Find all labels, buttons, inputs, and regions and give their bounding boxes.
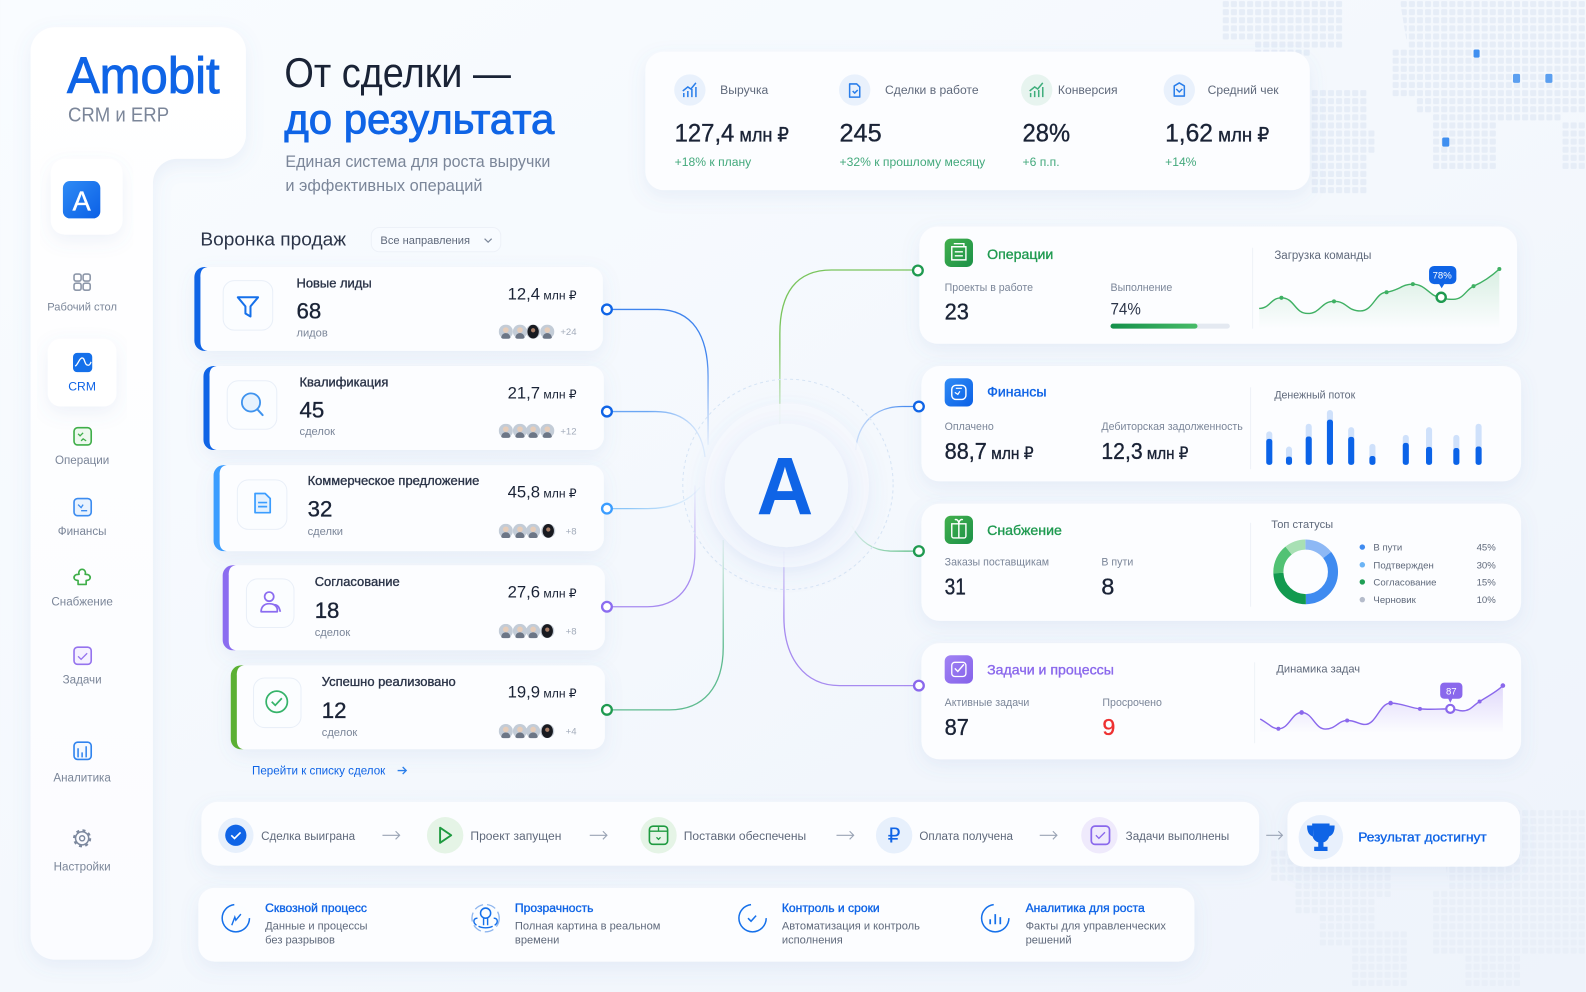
KPI: Средний чек: 1,62 млн ₽ [1165,120,1269,148]
benefit: Контроль и сроки: исполнения [782,934,843,946]
arrow to result [1266,831,1282,839]
world dot map top right [1222,0,1586,194]
module card: Финансы: Оплачено [945,421,994,433]
sidebar panel with logo [31,27,246,960]
dropdown: Все направления [380,235,470,247]
KPI: Средний чек [1164,74,1279,169]
funnel card: Новые лиды: 12,4 млн ₽ [508,284,577,303]
module card: Операции [919,227,1517,344]
nav: Настройки [54,830,111,874]
module card: Финансы: 12,3 млн ₽ [1101,438,1189,464]
KPI: Выручка: +18% к плану [675,155,752,169]
nav: Настройки: Настройки [54,861,111,874]
panel: KPI [645,52,1310,190]
KPI: Сделки в работе: Сделки в работе [885,83,979,97]
KPI: Конверсия: 28% [1023,120,1070,148]
funnel card: Квалификация: 45 [300,398,324,423]
module card: Задачи и процессы: Динамика задач [1276,663,1360,675]
funnel card: Успешно реализовано [231,665,605,749]
benefit: Контроль и сроки: Контроль и сроки [782,901,880,915]
donut chart: statuses [1278,545,1333,599]
arrow [1040,831,1057,839]
funnel card: Согласование: 27,6 млн ₽ [508,583,577,602]
hub: central A: A [757,442,813,533]
module card: Финансы [921,366,1521,481]
module card: Снабжение: В пути [1101,556,1133,568]
funnel card: Коммерческое предложение: +8 [566,526,577,537]
funnel card: Квалификация: сделок [300,426,335,438]
line chart: team load: 78% [1433,271,1452,282]
benefit: Прозрачность: Полная картина в реальном [515,920,660,932]
logo wordmark: Amobit [67,47,220,104]
module card: Задачи и процессы: Просрочено [1102,697,1162,709]
funnel card: Согласование: сделок [315,627,350,639]
module card: Операции: 23 [945,299,969,325]
benefit: Аналитика для роста: Аналитика для роста [1026,901,1145,915]
module card: Задачи и процессы [921,643,1521,759]
benefit: Контроль и сроки [739,901,920,946]
module card: Снабжение: Топ статусы [1271,519,1333,531]
world dot map bottom right [1270,809,1586,987]
nav: Финансы: Финансы [58,525,106,538]
legend: statuses: Черновик [1373,595,1417,606]
module card: Финансы: Дебиторская задолженность [1101,421,1243,433]
KPI: Конверсия [1021,74,1118,169]
panel: benefits [198,888,1194,962]
logo subtitle: CRM и ERP [68,104,169,126]
KPI: Выручка [674,74,789,169]
connectors: funnel to hub [607,309,723,710]
funnel card: Квалификация: +12 [560,426,577,437]
legend: statuses: В пути [1373,543,1402,554]
KPI: Сделки в работе: +32% к прошлому месяцу [840,155,986,169]
title: От сделки — [284,49,511,96]
card: result [1287,802,1520,867]
nav: Операции: Операции [55,454,109,467]
nav: Операции [55,428,109,467]
step: Задачи выполнены [1081,817,1229,853]
app tile: A: A [73,185,92,216]
module card: Задачи и процессы: 9 [1102,714,1115,740]
legend: statuses: Согласование [1373,577,1436,588]
arrow [836,831,854,839]
module card: Финансы: Денежный поток [1274,389,1356,401]
legend: statuses: 15% [1477,577,1496,588]
nav: CRM active tile [48,339,116,407]
connectors: hub to modules [780,270,918,686]
benefit: Сквозной процесс: без разрывов [265,934,335,946]
nav: Финансы [58,499,106,538]
module card: Операции: 74% [1111,300,1141,318]
nav: Задачи [63,647,102,687]
nav: CRM active tile: CRM [68,379,96,393]
title: до результата [284,95,555,142]
funnel card: Новые лиды: +24 [560,327,577,338]
funnel card: Согласование [223,565,605,650]
KPI: Сделки в работе [839,74,986,169]
funnel card: Квалификация [203,366,604,450]
nav: Задачи: Задачи [63,674,102,687]
funnel card: Новые лиды: Новые лиды [296,276,372,291]
benefit: Контроль и сроки: Автоматизация и контроль [782,920,920,932]
legend: statuses [1360,543,1496,606]
subtitle: и эффективных операций [285,177,483,195]
KPI: Конверсия: +6 п.п. [1023,155,1060,169]
KPI: Сделки в работе: 245 [840,120,882,148]
funnel card: Коммерческое предложение: Коммерческое предложение [308,473,479,488]
benefit: Сквозной процесс: Данные и процессы [265,920,368,932]
nav: Аналитика: Аналитика [53,772,111,785]
nav: Рабочий стол [47,274,117,313]
legend: statuses: Подтвержден [1373,560,1434,571]
module card: Снабжение: 31 [945,574,966,600]
module card: Финансы: 88,7 млн ₽ [945,438,1034,464]
step: Оплата получена [876,817,1014,853]
benefit: Прозрачность: времени [515,934,559,946]
funnel card: Согласование: +8 [566,627,577,638]
link: deals list: Перейти к списку сделок [252,765,386,778]
step: Сделка выиграна [218,818,356,853]
heading: funnel: Воронка продаж [200,230,347,250]
funnel card: Согласование: 18 [315,598,339,623]
step: Задачи выполнены: Задачи выполнены [1126,830,1229,843]
module card: Операции: Загрузка команды [1274,250,1371,262]
funnel card: Коммерческое предложение: сделки [308,526,343,538]
benefit: Аналитика для роста: Факты для управленческих [1026,920,1166,932]
dropdown [371,228,501,252]
step: Оплата получена: Оплата получена [919,830,1014,843]
nav: Снабжение [51,569,113,609]
module card: Операции: Выполнение [1111,282,1172,294]
step: Поставки обеспечены [640,817,806,853]
module card: Операции: Проекты в работе [945,282,1033,294]
funnel card: Квалификация: 21,7 млн ₽ [508,383,577,402]
benefit: Прозрачность [472,901,660,946]
funnel card: Успешно реализовано: +4 [566,727,577,738]
arrow [382,831,400,839]
funnel card: Успешно реализовано: Успешно реализовано [322,674,456,689]
module card: Снабжение: Заказы поставщикам [945,556,1049,568]
panel: process flow [201,802,1259,866]
benefit: Прозрачность: Прозрачность [515,901,593,915]
KPI: Средний чек: +14% [1165,155,1197,169]
legend: statuses: 30% [1477,560,1496,571]
module card: Задачи и процессы: Задачи и процессы [987,661,1114,677]
module card: Задачи и процессы: 87 [945,714,969,740]
funnel card: Коммерческое предложение: 32 [308,497,332,522]
nav: Рабочий стол: Рабочий стол [47,301,117,313]
module card: Операции: Операции [987,246,1053,262]
line chart: tasks [1260,683,1505,733]
arrow [590,831,607,839]
KPI: Конверсия: Конверсия [1058,83,1118,97]
funnel card: Квалификация: Квалификация [300,374,388,389]
step: Оплата получена: ₽ [888,825,901,847]
title [284,49,555,142]
benefit: Аналитика для роста [982,901,1166,946]
app tile: A [51,159,123,235]
connector dots: modules [913,266,924,690]
KPI: Средний чек: Средний чек [1208,83,1279,97]
funnel card: Новые лиды: 68 [296,299,321,324]
KPI: Выручка: Выручка [720,83,769,97]
funnel card: Успешно реализовано: 19,9 млн ₽ [508,683,577,702]
benefit: Сквозной процесс [222,901,368,946]
step: Поставки обеспечены: Поставки обеспечены [684,830,806,843]
subtitle: Единая система для роста выручки [285,153,550,171]
funnel card: Коммерческое предложение [214,465,604,551]
funnel card: Коммерческое предложение: 45,8 млн ₽ [508,483,577,502]
connector dots: funnel [602,305,612,715]
funnel card: Успешно реализовано: сделок [322,727,357,739]
line chart: tasks: 87 [1446,687,1457,698]
funnel card: Новые лиды [194,267,603,351]
module card: Задачи и процессы: Активные задачи [945,697,1029,709]
subtitle [285,153,550,195]
funnel card: Успешно реализовано: 12 [322,698,347,723]
funnel card: Согласование: Согласование [315,574,400,589]
step: Проект запущен: Проект запущен [470,830,561,843]
legend: statuses: 10% [1477,595,1496,606]
nav: Аналитика [53,742,111,785]
module card: Снабжение: Снабжение [987,522,1062,538]
step: Проект запущен [427,817,561,853]
legend: statuses: 45% [1477,543,1496,554]
module card: Финансы: Финансы [987,383,1047,399]
module card: Снабжение [921,504,1521,621]
benefit: Сквозной процесс: Сквозной процесс [265,901,367,915]
module card: Снабжение: 8 [1101,574,1114,600]
card: result: Результат достигнут [1358,829,1487,844]
hub: central A [683,379,893,590]
KPI: Выручка: 127,4 млн ₽ [675,120,789,148]
nav: Снабжение: Снабжение [51,596,113,609]
benefit: Аналитика для роста: решений [1026,934,1072,946]
funnel card: Новые лиды: лидов [296,328,328,340]
step: Сделка выиграна: Сделка выиграна [261,830,356,843]
line chart: team load [1259,266,1501,329]
bar chart: cash flow [1266,410,1482,465]
